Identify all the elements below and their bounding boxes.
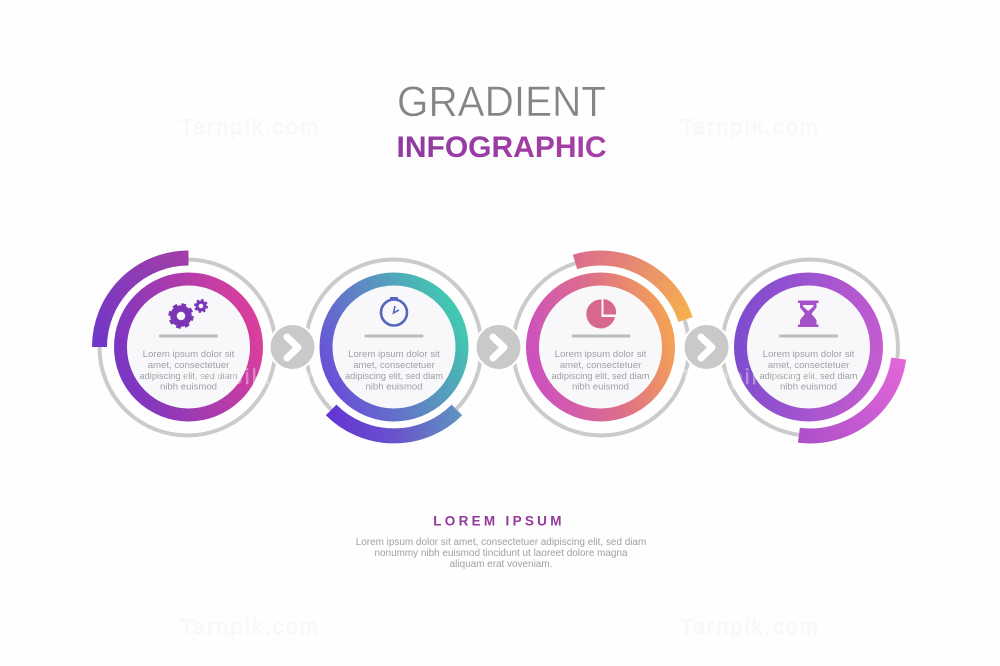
white gap under accent arc	[331, 410, 457, 436]
body text: Lorem ipsum dolor sit	[143, 349, 235, 360]
arrow: step 3 to 4	[684, 324, 730, 370]
gradient ring	[740, 279, 876, 415]
bottom text block: aliquam erat voveniam.	[450, 559, 552, 570]
inner disc	[127, 286, 250, 408]
outer grey ring	[722, 260, 898, 436]
panel: step 1 gears	[100, 258, 276, 436]
divider	[779, 334, 838, 338]
accent arc	[799, 359, 899, 436]
watermark top left: Tarnpik.com	[180, 115, 320, 139]
body text: nibh euismod	[365, 382, 423, 392]
watermark bottom left: Tarnpik.com	[180, 615, 320, 639]
watermark middle right: Tarnpik.com	[680, 365, 820, 389]
body text	[760, 349, 858, 392]
accent arc	[331, 410, 457, 436]
bottom text block: nonummy nibh euismod tincidunt ut laoreet dolore magna	[374, 548, 628, 559]
white gap under accent arc	[799, 359, 899, 436]
bottom text block	[356, 537, 646, 570]
bottom heading: LOREM IPSUM	[433, 514, 565, 528]
body text	[345, 349, 443, 392]
watermark middle left: Tarnpik.com	[180, 365, 320, 389]
body text: amet, consectetuer	[353, 360, 436, 371]
gradient ring	[532, 279, 668, 415]
divider	[364, 334, 424, 338]
outer grey ring	[513, 260, 689, 436]
divider	[572, 334, 630, 338]
body text: amet, consectetuer	[560, 360, 642, 371]
title	[396, 78, 606, 164]
body text: adipiscing elit, sed diam	[552, 371, 650, 382]
watermark bottom right: Tarnpik.com	[680, 615, 820, 639]
icon: gears	[170, 300, 207, 327]
inner disc	[539, 286, 662, 408]
body text: adipiscing elit, sed diam	[140, 371, 238, 382]
gradient ring	[326, 279, 462, 415]
arrow: step 2 to 3	[476, 324, 522, 370]
body text: Lorem ipsum dolor sit	[555, 349, 647, 360]
body text: Lorem ipsum dolor sit	[348, 349, 440, 360]
inner disc	[747, 286, 870, 408]
body text: adipiscing elit, sed diam	[760, 371, 858, 382]
icon: pie chart	[586, 299, 616, 328]
body text: adipiscing elit, sed diam	[345, 371, 443, 382]
panel: step 2 stopwatch	[306, 260, 482, 436]
body text: amet, consectetuer	[148, 360, 230, 371]
gradient ring	[120, 279, 256, 415]
body text: nibh euismod	[160, 382, 217, 392]
body text	[552, 349, 650, 392]
panel: step 4 hourglass	[722, 260, 899, 436]
outer grey ring	[306, 260, 482, 436]
body text	[140, 349, 238, 392]
bottom text block: Lorem ipsum dolor sit amet, consectetuer adipiscing elit, sed diam	[356, 537, 646, 548]
body text: Lorem ipsum dolor sit	[763, 349, 855, 360]
title line: infographic: INFOGRAPHIC	[396, 131, 606, 164]
accent arc	[575, 258, 686, 320]
icon: hourglass	[798, 300, 818, 327]
accent arc	[100, 258, 188, 347]
body text: nibh euismod	[572, 382, 629, 392]
title line: gradient: GRADIENT	[397, 78, 606, 126]
arrow: step 1 to 2	[270, 324, 316, 370]
divider	[159, 334, 218, 338]
watermark top right: Tarnpik.com	[680, 115, 820, 139]
icon: stopwatch	[381, 298, 407, 326]
panel: step 3 pie chart	[513, 258, 689, 436]
white gap under accent arc	[575, 258, 686, 320]
inner disc	[332, 286, 456, 408]
body text: nibh euismod	[780, 382, 837, 392]
outer grey ring	[100, 260, 276, 436]
body text: amet, consectetuer	[768, 360, 850, 371]
